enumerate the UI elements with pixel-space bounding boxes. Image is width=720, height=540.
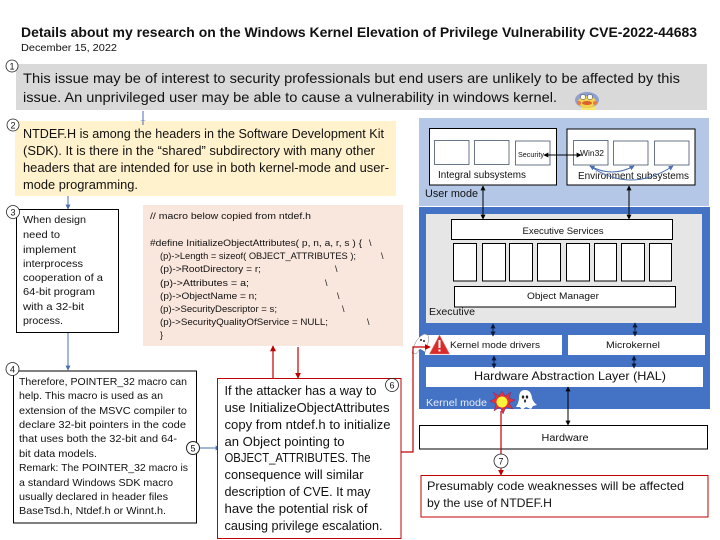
panel: attacker scenario: use InitializeObjectAttributes [224, 401, 390, 415]
step marker 5 [186, 442, 200, 454]
panel: user mode architecture: User mode [425, 188, 478, 200]
microkernel box: Microkernel [606, 340, 660, 351]
step marker 7: 7 [498, 456, 504, 466]
icon: ghost [516, 390, 537, 410]
panel: macro code listing: (p)->RootDirectory = r; [160, 264, 261, 274]
title: Details about my research on the Windows Kernel Elevation of Privilege Vulnerability CVE-2022-44683 [21, 25, 698, 40]
panel: attacker scenario: description of CVE. It may [224, 485, 371, 499]
panel: kernel mode architecture [419, 207, 710, 409]
step marker 4 [6, 362, 19, 376]
panel: design note: cooperation of a [23, 272, 103, 284]
panel: NTDEF.H note: NTDEF.H is among the headers in the Software Development Kit [23, 127, 385, 141]
kernel mode drivers box [425, 335, 562, 355]
panel: macro code listing: (p)->Length = sizeof( OBJECT_ATTRIBUTES ); [160, 251, 356, 261]
integral subsystems group [430, 128, 556, 185]
microkernel box [568, 335, 705, 355]
arrow: attacker note up to code [272, 346, 274, 378]
panel: POINTER_32 note: help. This macro is used as an [19, 390, 163, 402]
step marker 3 [6, 206, 20, 218]
panel: design note: 64-bit program [23, 286, 95, 298]
panel: macro code listing: \ [337, 291, 340, 301]
arrow: code down to attacker note [297, 347, 299, 378]
arrow: summary to SDK note [142, 111, 144, 125]
panel: POINTER_32 note: Remark: The POINTER_32 macro is [19, 462, 188, 474]
panel: NTDEF.H note: mode programming. [23, 178, 138, 192]
panel: POINTER_32 note: declare 32-bit pointers in the code [19, 419, 186, 431]
step marker 1: 1 [9, 62, 15, 72]
environment subsystems group: Win32 [580, 149, 605, 158]
panel: macro code listing: } [160, 330, 163, 340]
panel: weakness conclusion: by the use of NTDEF.H [427, 496, 552, 510]
panel: attacker scenario: causing privilege escalation. [224, 519, 382, 533]
panel: macro code listing: \ [367, 317, 370, 327]
panel: macro code listing: (p)->Attributes = a; [160, 278, 249, 288]
panel: attacker scenario: If the attacker has a way to [224, 384, 377, 398]
step marker 2 [7, 119, 19, 131]
icon: explosion [490, 391, 515, 414]
panel: NTDEF.H note: headers that are intended for use in both kernel-mode and user- [23, 161, 389, 175]
panel: NTDEF.H note [15, 121, 396, 196]
panel: macro code listing: \ [381, 251, 384, 261]
arrow: SDK note to design note [67, 196, 69, 209]
panel: weakness conclusion: Presumably code weaknesses will be affected [427, 479, 684, 493]
panel: attacker scenario: OBJECT_ATTRIBUTES. The [224, 451, 371, 465]
step marker 4: 4 [10, 364, 15, 374]
step marker 6: 6 [389, 380, 395, 390]
icon: warning triangle [430, 335, 450, 354]
panel: design note: process. [23, 315, 63, 327]
arrows: inside kernel mode [493, 323, 635, 368]
panel: POINTER_32 note: bit data models. [19, 448, 97, 460]
executive group: Executive Services [522, 226, 604, 237]
panel: attacker scenario: copy from ntdef.h to initialize [224, 418, 391, 432]
panel: POINTER_32 note: BaseTsd.h, Ntdef.h or Winnt.h. [19, 505, 166, 517]
panel: intro summary [16, 64, 707, 110]
panel: design note: with a 32-bit [22, 301, 84, 313]
panel: macro code listing: // macro below copied from ntdef.h [150, 211, 311, 221]
step marker 7 [494, 454, 508, 468]
arrow: POINTER_32 note to attacker note [200, 447, 220, 449]
panel: attacker scenario: an Object pointing to [224, 435, 345, 449]
executive group: Object Manager [527, 291, 599, 302]
panel: design note: interprocess [23, 258, 83, 270]
panel: macro code listing [143, 205, 403, 346]
arrow: attacker note to kernel mode drivers [401, 347, 430, 452]
panel: kernel mode architecture: Kernel mode [426, 398, 487, 409]
icon: cartoon duck [575, 92, 599, 110]
panel: design note: implement [23, 244, 76, 256]
integral subsystems group: Security [518, 152, 545, 159]
kernel mode drivers box: Kernel mode drivers [450, 340, 540, 351]
panel: design note [16, 210, 118, 332]
integral subsystems group: Integral subsystems [438, 170, 526, 181]
step marker 6 [386, 378, 398, 392]
panel: POINTER_32 note: that uses both the 32-bit and 64- [19, 433, 178, 445]
panel: intro summary: This issue may be of interest to security professionals but end users are unlikely to be affected by this [23, 70, 680, 86]
arrow: HAL to hardware [567, 387, 569, 425]
panel: attacker scenario: consequence will similar [224, 468, 364, 482]
panel: macro code listing: #define InitializeObjectAttributes( p, n, a, r, s ) { [150, 238, 362, 248]
panel: macro code listing: \ [342, 304, 345, 314]
date: December 15, 2022 [21, 43, 117, 54]
environment subsystems group: Environment subsystems [578, 171, 689, 182]
arrow: design note to POINTER_32 note [67, 333, 69, 370]
panel: macro code listing: \ [325, 278, 328, 288]
step marker 1 [6, 60, 18, 72]
panel: weakness conclusion [421, 476, 708, 517]
panel: macro code listing: \ [369, 238, 372, 248]
panel: intro summary: issue. An unprivileged user may be able to cause a vulnerability in windows kernel. [23, 89, 557, 105]
panel: NTDEF.H note: (SDK). It is there in the “shared” subdirectory with many other [23, 144, 375, 158]
panel: attacker scenario [218, 378, 401, 538]
panel: hardware: Hardware [542, 433, 589, 444]
icon: small ghost by drivers [412, 334, 429, 354]
panel: POINTER_32 note: usually declared in header files [19, 491, 168, 503]
panel: user mode architecture [419, 118, 709, 206]
panel: POINTER_32 note: a standard Windows SDK macro [19, 477, 173, 489]
hardware abstraction layer box [426, 367, 703, 387]
hardware abstraction layer box: Hardware Abstraction Layer (HAL) [474, 369, 666, 383]
panel: macro code listing: (p)->SecurityQualityOfService = NULL; [160, 317, 328, 327]
panel: design note: need to [23, 229, 60, 241]
panel: hardware [420, 426, 708, 449]
arrow: security to Win32 [544, 154, 581, 156]
arrow: kernel mode to weakness note [500, 411, 502, 475]
step marker 2: 2 [10, 120, 16, 130]
executive group: Executive [429, 306, 475, 318]
panel: design note: When design [23, 214, 86, 226]
panel: macro code listing: (p)->ObjectName = n; [160, 291, 257, 301]
executive group [426, 214, 702, 323]
panel: POINTER_32 note: Therefore, POINTER_32 macro can [19, 376, 187, 388]
panel: POINTER_32 note [14, 371, 196, 523]
panel: POINTER_32 note: extension of the MSVC compiler to [19, 405, 187, 417]
panel: attacker scenario: have the potential risk of [224, 502, 368, 516]
step marker 3: 3 [10, 208, 16, 218]
step marker 5: 5 [190, 444, 196, 454]
arrows: subsystems to executive services [483, 186, 629, 219]
environment subsystems group [567, 129, 695, 185]
panel: macro code listing: (p)->SecurityDescriptor = s; [160, 304, 277, 314]
panel: macro code listing: \ [335, 264, 338, 274]
